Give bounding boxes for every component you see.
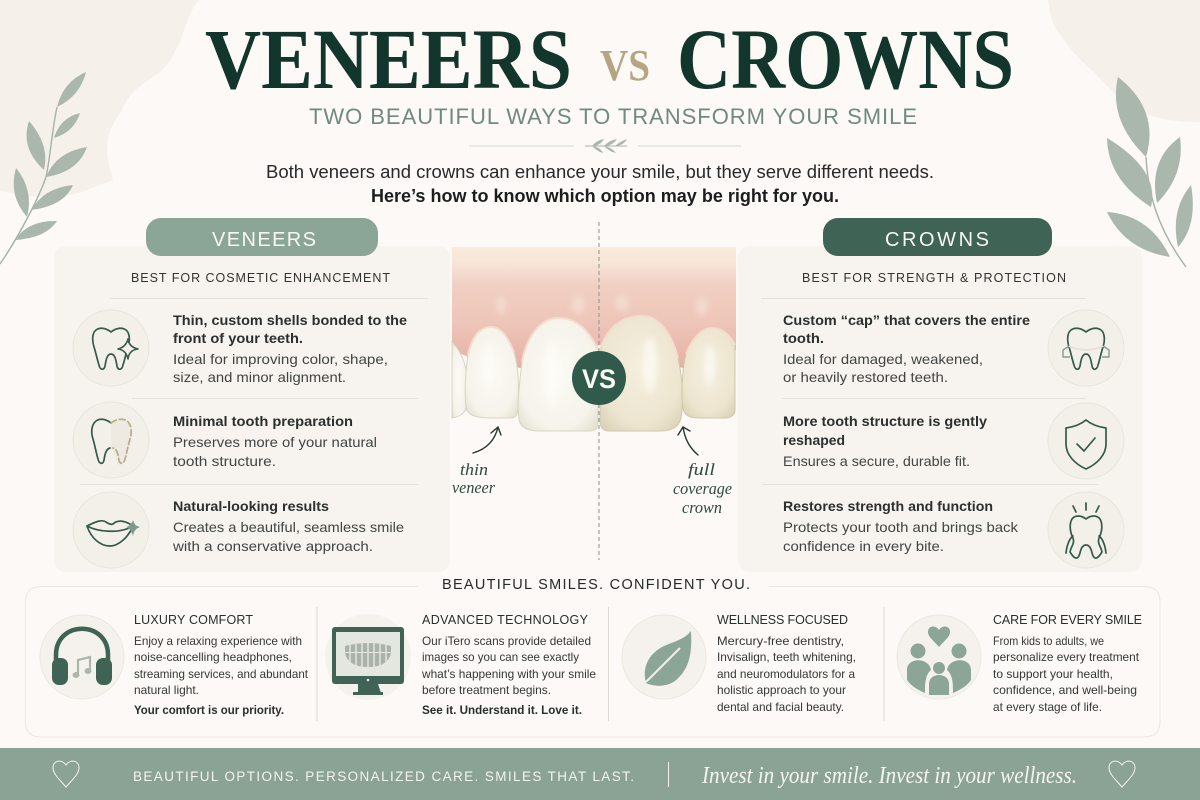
benefit: advanced technology: what’s happening with your smile xyxy=(421,667,596,681)
veneers point 3: Creates a beautiful, seamless smile xyxy=(173,519,404,535)
benefit: wellness focused: Invisalign, teeth whitening, xyxy=(717,650,856,664)
benefit: care for every smile: confidence, and well-being xyxy=(993,683,1137,697)
veneer teeth xyxy=(452,318,598,431)
veneers point 2 xyxy=(73,402,377,478)
benefit: wellness focused: WELLNESS FOCUSED xyxy=(717,613,848,627)
veneers tagline: BEST FOR COSMETIC ENHANCEMENT xyxy=(131,271,390,285)
benefit: advanced technology: Our iTero scans provide detailed xyxy=(422,634,591,648)
label: full coverage crown: coverage xyxy=(673,479,732,498)
benefit: advanced technology xyxy=(325,613,596,717)
gum highlights xyxy=(496,295,708,315)
icon: family with heart xyxy=(907,626,971,695)
benefit: care for every smile: personalize every treatment xyxy=(993,650,1140,664)
blob: top left xyxy=(0,0,199,197)
benefit: luxury comfort xyxy=(40,613,309,717)
veneers point 3: with a conservative approach. xyxy=(172,538,373,554)
label: full coverage crown: full xyxy=(688,460,715,479)
tooth highlights xyxy=(483,337,715,407)
crowns point 2: More tooth structure is gently xyxy=(783,413,987,429)
label: thin veneer: veneer xyxy=(452,478,495,497)
benefit: luxury comfort: noise-cancelling headphones, xyxy=(134,650,292,664)
veneers point 3 xyxy=(73,492,404,568)
icon: headphones xyxy=(52,629,112,685)
crowns point 2: reshaped xyxy=(783,432,845,448)
center dashed divider xyxy=(598,222,600,560)
veneers point 2: Preserves more of your natural xyxy=(173,434,377,450)
crowns point 3: confidence in every bite. xyxy=(783,538,944,554)
intro text: Here’s how to know which option may be right for you. xyxy=(371,186,839,206)
icon: tooth with veneer shell xyxy=(92,419,131,465)
crowns point 3 xyxy=(783,492,1124,568)
gum margins xyxy=(468,316,735,362)
benefit: care for every smile: CARE FOR EVERY SMILE xyxy=(993,613,1142,627)
benefits card xyxy=(26,577,1160,737)
benefit: advanced technology: images so you can see exactly xyxy=(422,650,579,664)
benefit: care for every smile: at every stage of life. xyxy=(993,700,1102,714)
label: full coverage crown xyxy=(673,460,732,517)
benefit: advanced technology: before treatment begins. xyxy=(422,683,551,697)
veneers point 3: Natural-looking results xyxy=(173,498,329,514)
blob: top right xyxy=(1048,0,1200,122)
crowns point 1 xyxy=(783,310,1124,386)
crowns pill: CROWNS xyxy=(885,229,989,251)
benefit: care for every smile xyxy=(897,613,1142,714)
vs badge xyxy=(572,351,626,405)
botanical: left branch xyxy=(0,72,87,264)
gums xyxy=(452,247,736,368)
panel: veneers xyxy=(54,218,450,572)
benefits heading: BEAUTIFUL SMILES. CONFIDENT YOU. xyxy=(442,577,750,593)
title xyxy=(205,11,1014,107)
icon: shield with check xyxy=(1066,420,1106,469)
vs badge: VS xyxy=(582,364,616,394)
benefit: wellness focused: and neuromodulators for a xyxy=(717,667,855,681)
veneers point 2: tooth structure. xyxy=(173,453,276,469)
veneers point 1: Thin, custom shells bonded to the xyxy=(173,312,407,328)
icon: smile with sparkle xyxy=(87,520,140,546)
footer tagline: BEAUTIFUL OPTIONS. PERSONALIZED CARE. SMILES THAT LAST. xyxy=(133,769,634,784)
subtitle: TWO BEAUTIFUL WAYS TO TRANSFORM YOUR SMILE xyxy=(309,104,917,129)
crowns point 2: Ensures a secure, durable fit. xyxy=(783,453,970,469)
benefit: luxury comfort: Your comfort is our priority. xyxy=(134,703,284,717)
footer script line: Invest in your smile. Invest in your wellness. xyxy=(701,763,1077,789)
icon: tooth with sparkle xyxy=(93,328,138,369)
crowns point 3: Restores strength and function xyxy=(783,498,993,514)
label: full coverage crown: crown xyxy=(682,498,722,517)
crown teeth xyxy=(600,316,735,431)
veneers point 1: Ideal for improving color, shape, xyxy=(173,351,388,367)
botanical: right branch xyxy=(1107,77,1193,267)
teeth comparison illustration xyxy=(452,222,736,560)
veneers point 1 xyxy=(73,310,407,386)
benefit: advanced technology: See it. Understand it. Love it. xyxy=(422,703,582,717)
footer band xyxy=(0,748,1200,800)
benefit: care for every smile: From kids to adults, we xyxy=(993,634,1104,648)
intro text xyxy=(266,162,934,206)
veneers pill xyxy=(146,218,378,256)
icon: leaf xyxy=(638,631,691,688)
veneers point 1: size, and minor alignment. xyxy=(173,369,346,385)
label: thin veneer xyxy=(452,460,495,497)
title: VENEERS xyxy=(205,11,572,107)
crowns point 1: or heavily restored teeth. xyxy=(783,369,948,385)
arrow: to veneer xyxy=(473,427,501,453)
arrow: to crown xyxy=(678,427,698,455)
benefit: wellness focused: dental and facial beauty. xyxy=(717,700,844,714)
veneers pill: VENEERS xyxy=(212,229,316,251)
icon: tooth with cap xyxy=(1063,328,1109,369)
crowns tagline: BEST FOR STRENGTH & PROTECTION xyxy=(802,271,1066,285)
benefit: care for every smile: to support your health, xyxy=(993,667,1113,681)
title: VS xyxy=(600,41,650,90)
benefit: luxury comfort: streaming services, and abundant xyxy=(134,667,309,681)
veneers point 2: Minimal tooth preparation xyxy=(173,413,353,429)
crowns point 1: Ideal for damaged, weakened, xyxy=(783,351,983,367)
panel: crowns xyxy=(738,218,1142,572)
benefit: wellness focused xyxy=(622,613,856,714)
benefit: luxury comfort: LUXURY COMFORT xyxy=(134,613,253,627)
icon: heart right xyxy=(1109,761,1135,787)
crowns point 2 xyxy=(783,403,1124,479)
benefit: wellness focused: holistic approach to your xyxy=(717,683,846,697)
label: thin veneer: thin xyxy=(460,460,488,479)
benefit: luxury comfort: Enjoy a relaxing experience with xyxy=(134,634,302,648)
crowns pill xyxy=(823,218,1052,256)
intro text: Both veneers and crowns can enhance your smile, but they serve different needs. xyxy=(266,162,934,182)
title: CROWNS xyxy=(677,11,1014,107)
icon: strong tooth with rays xyxy=(1066,503,1106,558)
crowns point 3: Protects your tooth and brings back xyxy=(783,519,1019,535)
benefit: wellness focused: Mercury-free dentistry, xyxy=(717,634,844,648)
benefit: luxury comfort: natural light. xyxy=(134,683,199,697)
crowns point 1: Custom “cap” that covers the entire xyxy=(783,312,1030,328)
veneers point 1: front of your teeth. xyxy=(173,330,303,346)
divider with sprig xyxy=(469,139,741,153)
crowns point 1: tooth. xyxy=(783,330,824,346)
icon: heart left xyxy=(53,761,79,787)
icon: monitor with scan xyxy=(332,627,404,695)
benefit: advanced technology: ADVANCED TECHNOLOGY xyxy=(422,613,589,627)
